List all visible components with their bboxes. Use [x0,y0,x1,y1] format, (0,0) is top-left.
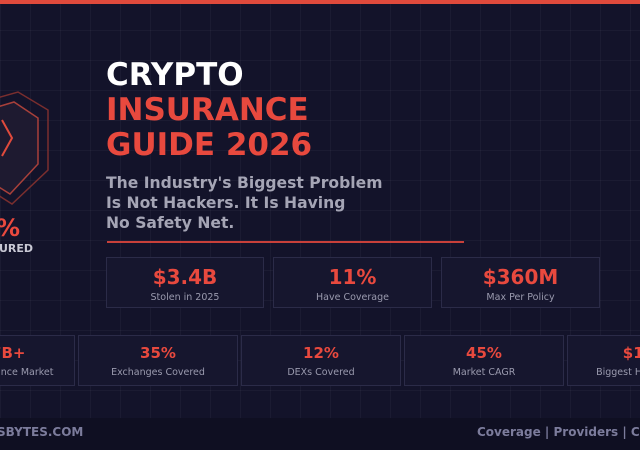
stat: dexs: 12% [303,344,339,362]
title: INSURANCE [106,92,309,128]
title [106,57,312,163]
stat: exchanges: 35% [140,344,176,362]
subtitle: Is Not Hackers. It Is Having [106,194,345,212]
stat: coverage: Have Coverage [316,292,389,303]
title: CRYPTO [106,57,244,93]
stat: max policy [441,257,600,308]
stat: stolen [106,257,264,308]
stat: exchanges [78,335,238,386]
subtitle: The Industry's Biggest Problem [106,174,382,192]
stat: cagr: 45% [466,344,502,362]
stat: biggest hack [567,335,640,386]
stat: dexs: DEXs Covered [287,367,355,378]
subtitle [106,174,382,232]
stat: coverage [273,257,432,308]
stat: market [0,335,75,386]
footer [0,418,640,450]
icon: shield [0,91,49,205]
stat: max policy: $360M [483,265,558,289]
stat: stolen: $3.4B [153,265,217,289]
stat: coverage: 11% [329,265,376,289]
top accent bar [0,0,640,4]
divider [107,241,464,243]
subtitle: No Safety Net. [106,214,234,232]
title: GUIDE 2026 [106,127,312,163]
stat: stolen: Stolen in 2025 [151,292,219,303]
stat: max policy: Max Per Policy [486,292,555,303]
stat: cagr [404,335,564,386]
stat: dexs [241,335,401,386]
stat: cagr: Market CAGR [453,367,515,378]
stat: exchanges: Exchanges Covered [111,367,205,378]
text: URED [0,242,33,255]
